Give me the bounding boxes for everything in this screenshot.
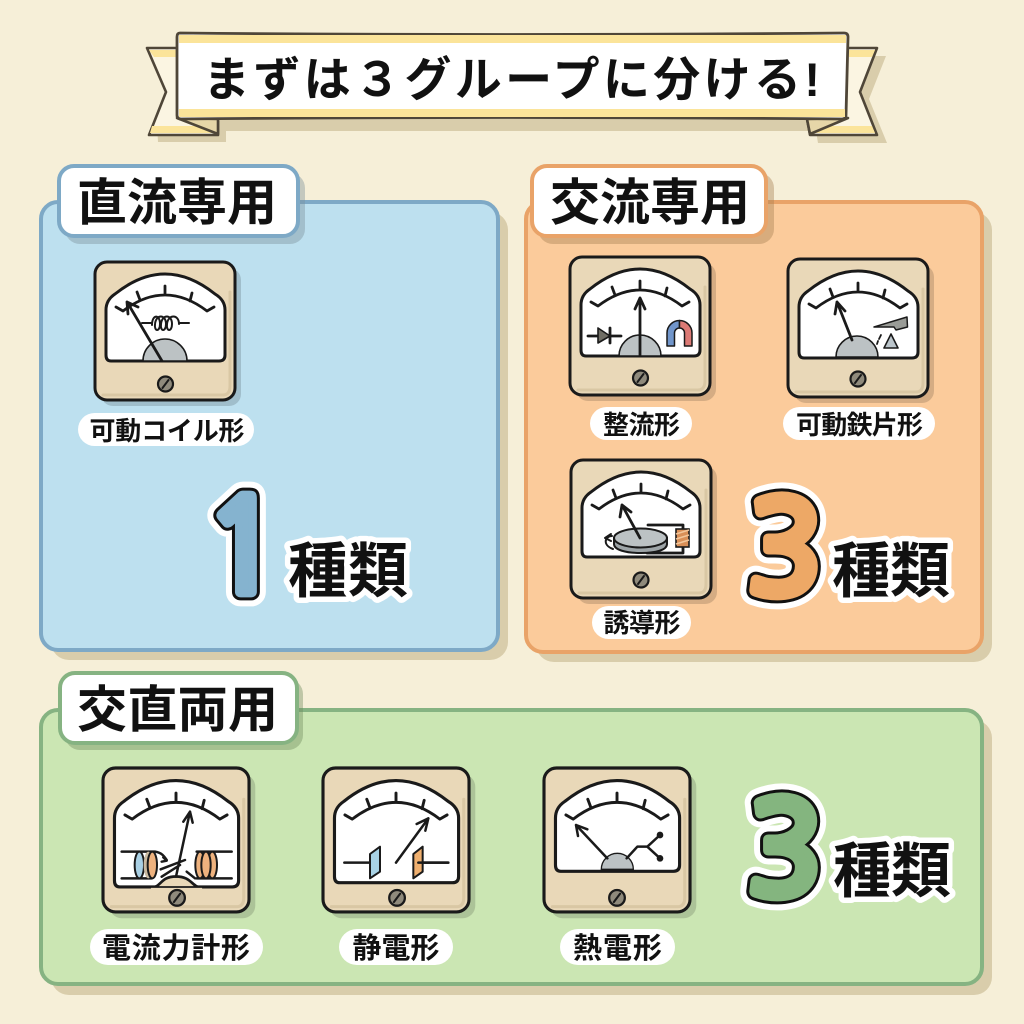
- banner right tail: [807, 48, 877, 135]
- heading tab: DC only: [59, 166, 305, 244]
- count: 1 type: 1: [204, 485, 282, 613]
- meter body: [103, 768, 255, 918]
- count: 3 types (AC/DC): [746, 788, 951, 916]
- count: 3 types (AC/DC): 3: [746, 788, 824, 916]
- meter drawing: [576, 825, 663, 869]
- label: moving coil: 可動コイル形: [90, 416, 244, 446]
- count: 3 types (AC): 種類: [832, 538, 950, 605]
- heading tab: DC only: 直流専用: [77, 175, 277, 231]
- blue panel body: [41, 202, 508, 660]
- count: 3 types (AC/DC): 種類: [833, 838, 951, 905]
- count: 1 type: 1: [204, 485, 282, 613]
- title text: まずは３グループに分ける!: [203, 53, 820, 106]
- count: 3 types (AC): 3: [746, 487, 824, 615]
- label: electrostatic: [339, 929, 453, 965]
- count: 1 type: 種類: [288, 538, 408, 605]
- count: 3 types (AC): [746, 487, 950, 615]
- label: moving iron: 可動鉄片形: [796, 410, 923, 440]
- title banner: [147, 33, 887, 143]
- label: rectifier: [590, 407, 692, 440]
- count: 3 types (AC): 3: [746, 487, 824, 615]
- orange panel body: [526, 202, 992, 662]
- meter: electrostatic: [323, 768, 475, 918]
- label: thermoelectric: 熱電形: [573, 932, 662, 965]
- count: 1 type: 1: [204, 485, 282, 613]
- count: 3 types (AC/DC): 3: [746, 788, 824, 916]
- count: 1 type: [204, 485, 408, 613]
- meter: moving iron: [788, 259, 934, 403]
- label: rectifier: 整流形: [603, 410, 680, 440]
- panel: AC only: [526, 166, 992, 662]
- panel: DC only: [41, 166, 508, 660]
- meter: electrodynamometer: [103, 768, 255, 918]
- heading tab: AC only: [532, 166, 774, 244]
- label: induction: 誘導形: [604, 608, 680, 638]
- meter: rectifier: [570, 257, 716, 401]
- green panel body: [41, 710, 992, 995]
- count: 3 types (AC/DC): 3: [746, 788, 824, 916]
- banner main: [177, 33, 848, 119]
- heading tab: AC/DC: [60, 673, 303, 750]
- banner folds: [177, 118, 848, 134]
- meter body: [544, 768, 696, 918]
- banner left tail: [147, 48, 218, 135]
- meter drawing: [122, 812, 232, 878]
- label: electrodynamometer: 電流力計形: [102, 932, 250, 965]
- panel: AC/DC: [41, 673, 992, 995]
- meter: moving coil: [95, 262, 241, 406]
- meter: thermoelectric: [544, 768, 696, 918]
- meter body: [323, 768, 475, 918]
- label: electrostatic: 静電形: [352, 932, 440, 965]
- count: 3 types (AC): 3: [746, 487, 824, 615]
- heading tab: AC/DC: 交直両用: [77, 682, 278, 738]
- meter drawing: [344, 818, 448, 878]
- heading tab: AC only: 交流専用: [550, 175, 750, 231]
- label: thermoelectric: [560, 929, 675, 965]
- meter: induction: [571, 460, 717, 604]
